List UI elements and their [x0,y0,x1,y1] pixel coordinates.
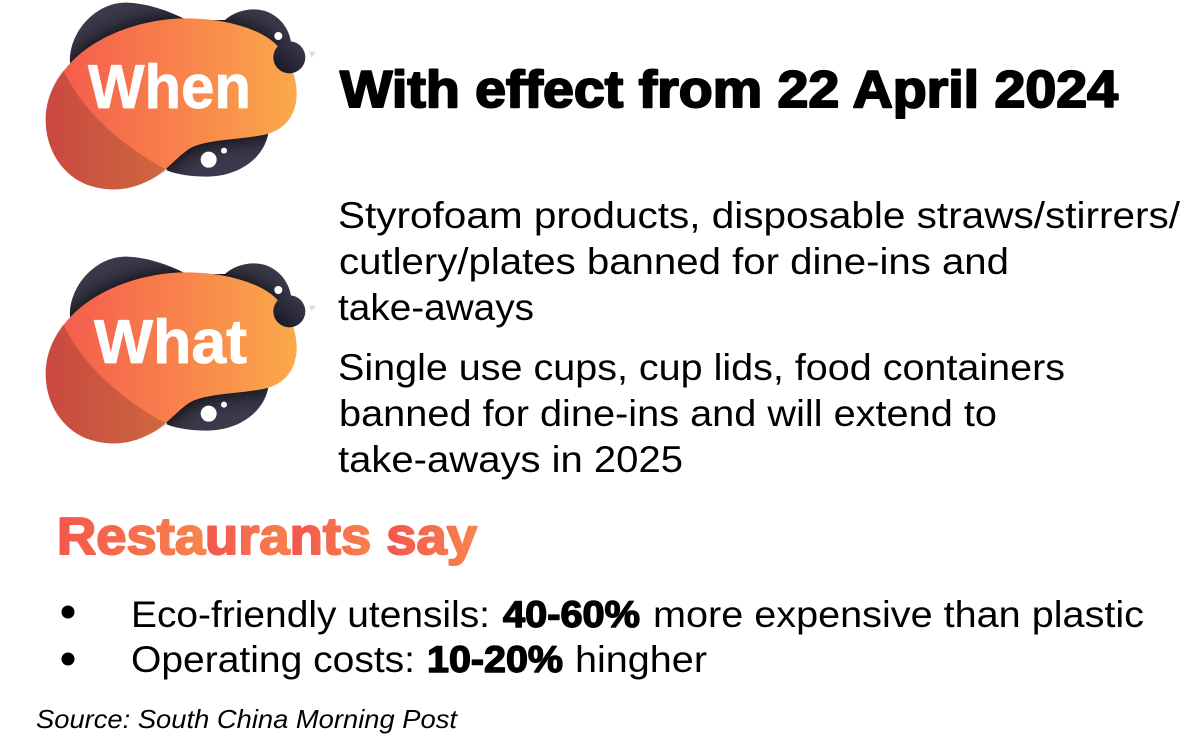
bullet list: restaurant costs [62,594,1144,680]
label: What: What [94,308,247,377]
text block: second ban item [338,347,1065,480]
bullet item: operating costs: Operating costs: [131,639,415,680]
text block: first ban item [338,195,1181,328]
bullet item: operating costs: 10-20% [427,639,563,680]
icon: orange blob with What label [46,257,316,443]
label: When: When [88,53,251,122]
bullet item: eco-friendly utensils: 40-60% [503,594,640,635]
text block: second ban item: Single use cups, cup lids, food containers [338,347,1065,388]
heading: With effect from 22 April 2024: With effect from 22 April 2024 [340,61,1118,119]
text block: second ban item: take-aways in 2025 [338,439,683,480]
bullet item: eco-friendly utensils [62,594,1144,635]
bullet item: eco-friendly utensils: Eco-friendly utensils: [131,594,490,635]
icon: orange blob with When label [46,3,316,189]
text block: first ban item: cutlery/plates banned for dine-ins and [339,241,1009,282]
source note: Source: South China Morning Post [36,704,459,734]
bullet item: operating costs [62,639,707,680]
text block: first ban item: take-aways [338,287,534,328]
bullet item: eco-friendly utensils: more expensive than plastic [653,594,1144,635]
bullet item: operating costs: hingher [575,639,707,680]
text block: first ban item: Styrofoam products, disposable straws/stirrers/ [338,195,1181,236]
heading: Restaurants say: Restaurants say [57,508,477,566]
text block: second ban item: banned for dine-ins and will extend to [339,393,997,434]
